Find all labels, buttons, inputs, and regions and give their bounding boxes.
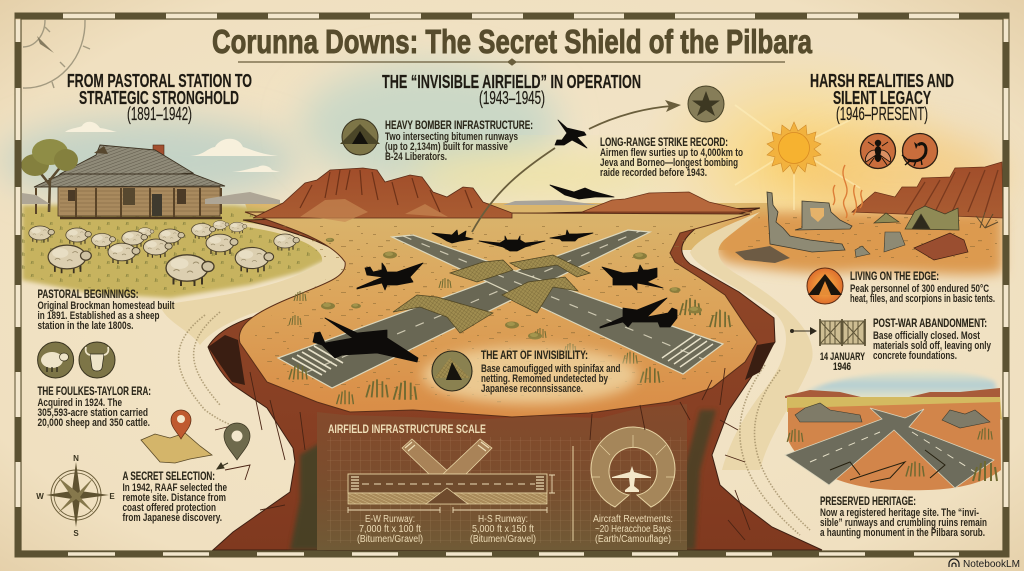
text: closure date [820,351,865,373]
compass rose: E [109,492,115,501]
text: post-war abandonment: materials sold off, leaving only [873,340,991,352]
cliff cracks [215,368,750,540]
text: closure date: 1946 [833,361,851,373]
text: long-range strike record [600,135,743,179]
canyon cliff walls [208,208,822,550]
text: a secret selection: coast offered protection [122,502,216,514]
clouds [65,122,280,172]
icon: warning tent [807,268,843,304]
revetment label: ~20 Heracchoe Bays [595,524,671,535]
text: pastoral beginnings: in 1891. Established as a sheep [38,310,160,322]
text: pastoral beginnings: Original Brockman homestead built [38,300,175,312]
arrow: strike route [472,100,681,232]
section heading: harsh realities: (1946–PRESENT) [836,103,928,124]
section heading: harsh realities [810,70,954,124]
text: preserved heritage [820,494,987,539]
icon: star medal [688,86,724,122]
NotebookLM logo: NotebookLM [963,558,1020,570]
text: long-range strike record: Airmen flew surties up to 4,000km to [600,147,743,159]
text: preserved heritage: PRESERVED HERITAGE: [820,494,916,508]
H-S runway label: (Bitumen/Gravel) [470,534,536,545]
title: Corunna Downs: The Secret Shield of the Pilbara [212,23,813,60]
icon: sheep [38,342,74,378]
text: foulkes-taylor era: THE FOULKES-TAYLOR ERA: [38,384,151,398]
text: living on the edge: LIVING ON THE EDGE: [850,269,939,283]
text: heavy bomber infrastructure: (up to 2,134m) built for massive [385,141,508,153]
section heading: pastoral [67,70,252,124]
icon: cattle [79,342,115,378]
scrub and shrubs on the plateau [289,238,730,404]
sky wash [0,45,1005,275]
dimension lines [348,475,555,513]
text: heavy bomber infrastructure: Two intersecting bitumen runways [385,131,518,143]
homestead [34,145,225,218]
icon: red map pin [171,410,191,439]
pasture land [22,205,330,298]
H-S runway label: 5,000 ft x 150 ft [472,524,534,535]
right pale road [690,212,813,470]
tyre tracks [179,312,810,535]
text: foulkes-taylor era: 20,000 sheep and 350 cattle. [38,417,150,429]
E-W runway label: E-W Runway: [365,514,415,525]
section heading: invisible airfield: THE “INVISIBLE AIRFIELD” IN OPERATION [382,71,641,92]
icon: camouflaged tent [432,351,472,391]
text: long-range strike record: raide recorded before 1943. [600,167,707,179]
cliff dark crevice [208,335,775,385]
compass rose [36,454,115,538]
aircraft icon [612,466,651,492]
flying bomber [555,120,587,148]
icon: scorpion [902,134,938,168]
revetment diagram [591,427,675,507]
small direction arrow [217,463,228,469]
text: foulkes-taylor era: 305,593-acre station carried [38,407,148,419]
text: foulkes-taylor era [38,384,151,429]
revetment label: (Earth/Camouflage) [595,534,671,545]
section heading: invisible airfield [382,71,641,108]
text: the art of invisibility [481,348,620,395]
plateau top [239,212,757,417]
text: long-range strike record: Jeva and Borneo—longest bombing [600,157,738,169]
callout halo [422,346,638,404]
text: pastoral beginnings [38,287,175,332]
blueprint panel: airfield infrastructure scale [317,404,687,550]
icon: folded map [141,433,212,463]
mesa: right [852,162,1003,218]
text: foulkes-taylor era: Acquired in 1924. The [38,397,122,409]
H-S runway label: H-S Runway: [478,514,528,525]
icon: grey map pin [224,423,250,460]
diagram: crossed runways [348,439,555,513]
camouflage netting [393,255,590,333]
roof [60,145,193,176]
mesa: centre [503,192,752,212]
text: preserved heritage: Now a registered heritage site. The “invi- [820,507,979,519]
icon: closed gate [820,319,865,346]
text: post-war abandonment [873,316,991,362]
section heading: harsh realities: SILENT LEGACY [833,87,931,108]
compass rose: N [73,454,79,463]
text: pastoral beginnings: station in the late 1800s. [38,320,134,332]
long runway NE-SW [278,230,650,388]
mesa: left [253,168,512,222]
revetment label: Aircraft Revetments: [593,514,673,525]
sheep flock [29,221,299,286]
E-W runway label [357,514,423,545]
arrow: to closure gate [790,327,817,335]
chimney [153,145,164,158]
pale road ring [160,222,345,345]
text: the art of invisibility: netting. Remomed undetected by [481,373,608,385]
text: a secret selection: remote site. Distance from [122,492,226,504]
text: the art of invisibility: THE ART OF INVISIBILITY: [481,348,588,362]
text: pastoral beginnings: PASTORAL BEGINNINGS: [38,287,138,301]
sun [735,105,860,210]
text: the art of invisibility: Base camoufigged with spinifax and [481,363,620,375]
silhouette bomber fleet [313,185,677,362]
far plain [245,203,770,250]
text: a secret selection: In 1942, RAAF selected the [122,482,227,494]
tree [21,139,78,212]
text: post-war abandonment: Base officially closed. Most [873,330,980,342]
text: a secret selection [122,469,227,524]
right desert land [715,212,1003,275]
E-W runway label: (Bitumen/Gravel) [357,534,423,545]
text: post-war abandonment: concrete foundations. [873,350,957,362]
wreckage [855,212,998,260]
revetment label [593,514,673,545]
text: long-range strike record: LONG-RANGE STRIKE RECORD: [600,135,728,149]
heritage scene: ruined runways today [785,371,1002,490]
icon: fly [860,134,896,168]
icon: tent [340,119,380,155]
text: heavy bomber infrastructure [385,118,533,163]
cliff shadow right [680,410,716,550]
compass rose: S [73,529,79,538]
cliff shadow left [290,440,325,550]
text: a secret selection: A SECRET SELECTION: [122,469,215,483]
section heading: pastoral: FROM PASTORAL STATION TO [67,70,252,91]
section heading: pastoral: STRATEGIC STRONGHOLD [79,87,239,108]
panel heading: AIRFIELD INFRASTRUCTURE SCALE [328,424,486,436]
text: the art of invisibility: Japanese reconnsissance. [481,383,583,395]
H-S runway label [470,514,536,545]
title rule [238,59,785,65]
abandoned tents [874,206,959,230]
E-W runway label: 7,000 ft x 100 ft [359,524,421,535]
section heading: harsh realities: HARSH REALITIES AND [810,70,954,91]
long runway NW-SE [392,235,723,374]
compass rose: W [36,492,44,501]
section heading: pastoral: (1891–1942) [127,103,192,124]
compass arc decoration [23,20,90,88]
text: heavy bomber infrastructure: B-24 Liberators. [385,151,447,163]
section heading: invisible airfield: (1943–1945) [479,87,545,108]
text: living on the edge [850,269,995,305]
text: closure date: 14 JANUARY [820,351,865,363]
ruined walls [735,192,852,263]
divider [572,446,574,541]
text: a secret selection: from Japanese discovery. [122,512,222,524]
heat shimmer [833,165,862,218]
text: heavy bomber infrastructure: HEAVY BOMBER INFRASTRUCTURE: [385,118,533,132]
distant hills [22,192,280,204]
